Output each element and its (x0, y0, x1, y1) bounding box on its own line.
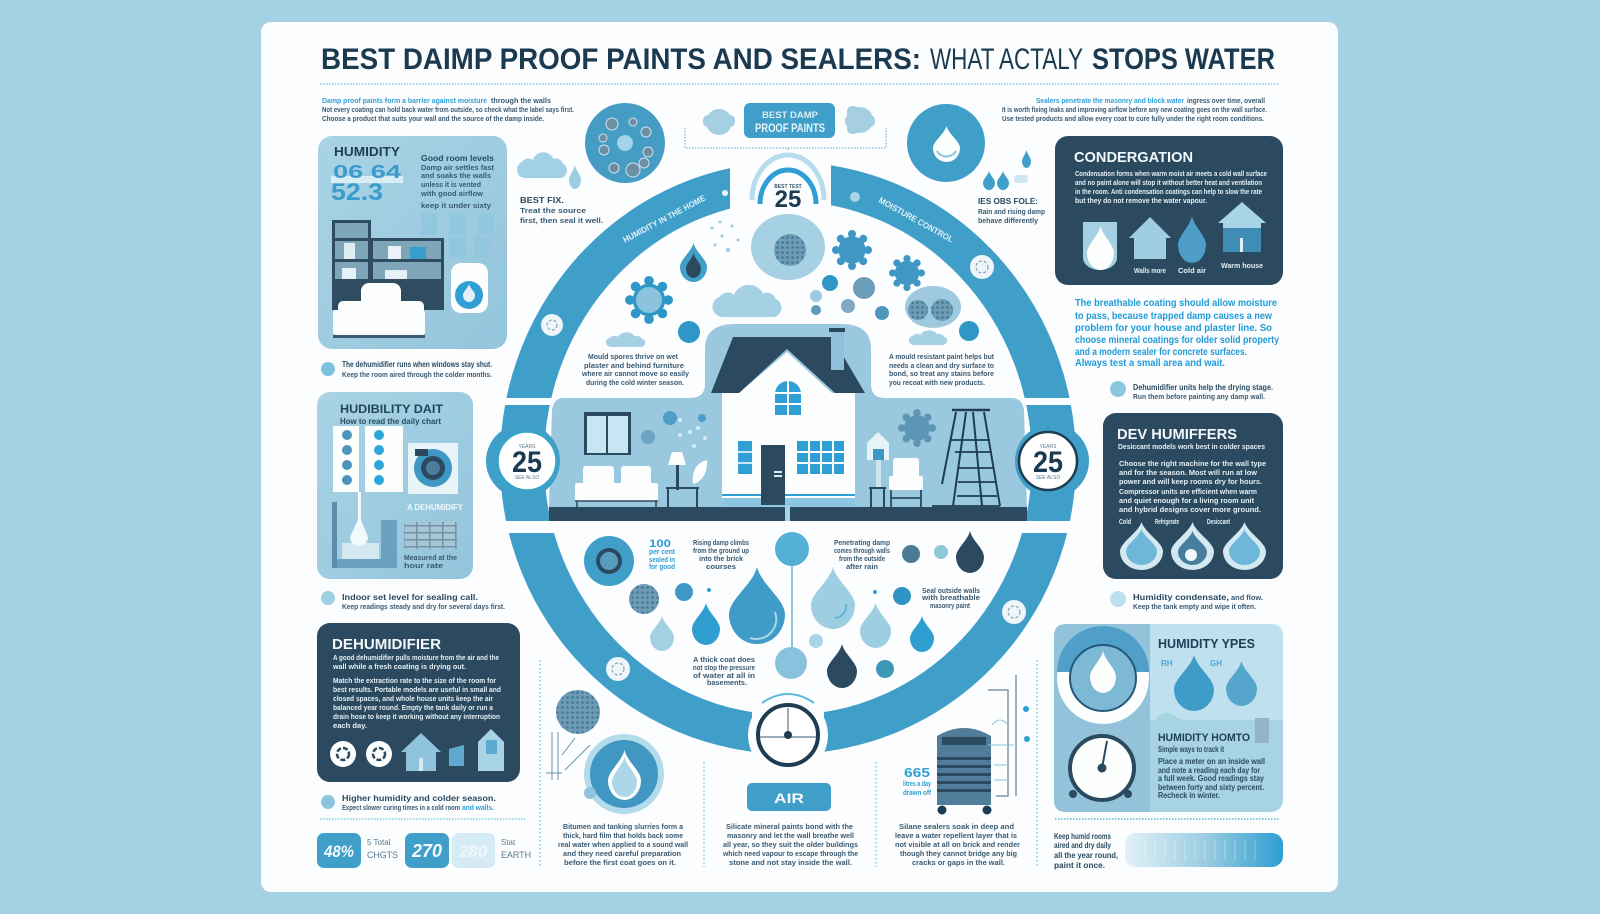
blob with virus (751, 214, 825, 280)
gradient scale bar (1125, 833, 1283, 867)
bottom right note: paint it once. (1054, 861, 1105, 870)
lower text right: Penetrating damp (834, 540, 890, 547)
panel: humidity room: and soaks the walls (421, 173, 491, 180)
bullet note: panel one: The dehumidifier runs when windows stay shut. (342, 360, 492, 369)
stat 665 (903, 765, 932, 797)
bullet note: panel one (321, 360, 492, 379)
ring labels: HUMIDITY IN THE HOME (621, 193, 707, 245)
column text 1: thick, hard film that holds back some (563, 833, 683, 840)
bullet note: drop types: and flow. (1231, 595, 1263, 602)
panel: humidity types: RH (1161, 659, 1173, 668)
centre text left: during the cold winter season. (586, 380, 684, 387)
centre text left: where air cannot move so easily (581, 371, 689, 378)
note right of drops: masonry paint (930, 603, 971, 610)
column text 1: real water when applied to a sound wall (558, 842, 688, 849)
arch window (775, 381, 801, 415)
puzzle icons (703, 106, 875, 135)
badge left: SEE ALSO (515, 475, 539, 481)
centre text right: bond, so treat any stains before (889, 371, 994, 378)
bullet note: dehumidifier: Expect slower curing times in a cold room (342, 805, 460, 812)
badge left: 25 (512, 446, 542, 479)
short note left (520, 196, 603, 225)
header pill (744, 103, 835, 138)
title (321, 43, 1275, 76)
panel: humidity room: 06 64 (333, 162, 401, 182)
chimney (829, 328, 845, 370)
sofa (575, 466, 658, 507)
lower text right (834, 540, 890, 571)
column text 1: and they need careful preparation (563, 851, 681, 858)
panel: humidity types: between forty and sixty percent. (1158, 783, 1264, 792)
note under drops: not stop the pressure (693, 665, 755, 672)
note under drops: A thick coat does (693, 657, 755, 664)
column text 2: stone and not stay inside the wall. (729, 860, 852, 867)
top gauge: 25 (775, 186, 801, 213)
column text 2: all year, so they suit the older buildings (723, 842, 858, 849)
intro text right: It is worth fixing leaks and improving airflow before any new coating goes on the wall surface. (1002, 107, 1267, 114)
right furniture (867, 432, 923, 507)
panel: dehumidifier: closed spaces, and whole house units keep the air (333, 696, 493, 703)
top gauge (752, 155, 824, 213)
panel: drop types: power and will keep rooms dry for hours. (1119, 479, 1262, 486)
panel: drop types: and quiet enough for a living room unit (1119, 498, 1255, 505)
panel: condensation: CONDERGATION (1074, 149, 1193, 166)
badge right: 25 (1033, 446, 1063, 479)
panel: humidity chart: HUDIBILITY DAIT (340, 402, 444, 416)
bullet note: dehumidifier: and walls. (462, 805, 494, 812)
house scene (549, 324, 1027, 521)
stat boxes left: 270 (411, 841, 442, 861)
dehumidifier tank (937, 675, 1030, 814)
blue paragraph: to pass, because trapped damp causes a new (1075, 311, 1272, 322)
note under drops: of water at all in (693, 673, 755, 680)
lower text blocks: courses (706, 564, 736, 571)
clock (1069, 736, 1134, 800)
bullet note: dehumidifier (321, 794, 496, 812)
column text 3: though they cannot bridge any big (900, 851, 1017, 858)
humidity gauge (1057, 626, 1149, 724)
stat 100: for good (649, 564, 675, 571)
bottom right note: Keep humid rooms (1054, 832, 1111, 841)
panel: humidity types: and note a reading each day for (1158, 766, 1260, 775)
column text 2: which need vapour to escape through the (722, 851, 858, 858)
blue paragraph: and a modern sealer for concrete surfaces. (1075, 347, 1247, 358)
panel: condensation: but they do not remove the water vapour. (1075, 198, 1207, 205)
bottom right note: aired and dry daily (1054, 841, 1111, 850)
header pill: BEST DAMP (762, 110, 819, 121)
blue paragraph: The breathable coating should allow moisture (1075, 298, 1277, 309)
bullet note: dehumidifier: Higher humidity and colder season. (342, 794, 496, 803)
intro text right: ingress over time, overall (1187, 98, 1265, 105)
panel: drop types: Compressor units are efficient when warm (1119, 489, 1257, 496)
centre text left: Mould spores thrive on wet (588, 354, 679, 361)
scene background (549, 324, 1027, 507)
stat 665: litres a day (903, 781, 931, 788)
lower text right: from the outside (839, 556, 885, 563)
panel: humidity types: HUMIDITY YPES (1158, 636, 1255, 651)
panel: dehumidifier: Match the extraction rate to the size of the room for (333, 678, 496, 685)
panel: humidity types: HUMIDITY HOMTO (1158, 732, 1250, 744)
panel: humidity chart: Measured at the (404, 555, 457, 562)
panel: dehumidifier (317, 623, 520, 782)
panel: humidity room: 52.3 (331, 179, 383, 206)
bullet note: humidity chart (321, 591, 505, 611)
central ring (480, 150, 1100, 764)
lower text blocks: into the brick (699, 556, 743, 563)
intro text left: Not every coating can hold back water from outside, so check what the label says first. (322, 107, 574, 114)
panel: humidity chart: How to read the daily chart (340, 417, 441, 426)
small drops (983, 150, 1031, 190)
panel: humidity room: keep it under sixty (421, 203, 491, 210)
bullet note: humidity chart: Keep readings steady and dry for several days first. (342, 604, 505, 611)
bullet note: drop types: Humidity condensate, (1133, 593, 1229, 602)
panel: dehumidifier: DEHUMIDIFIER (332, 636, 441, 653)
column text 2 (722, 824, 858, 867)
panel: condensation: Walls more (1134, 268, 1166, 275)
title: WHAT ACTALY (930, 43, 1083, 76)
blue circle with droplets (585, 103, 665, 183)
badge left: YEARS (519, 444, 536, 450)
virus (898, 409, 936, 447)
main white card (261, 22, 1338, 892)
icons (1083, 202, 1266, 270)
stat boxes left: 280 (458, 842, 488, 861)
panel: dehumidifier: drain hose to keep it working without any interruption (333, 714, 500, 721)
roof (711, 337, 865, 393)
title: BEST DAIMP PROOF PAINTS AND SEALERS: (321, 43, 921, 76)
bullet note: drop types: Keep the tank empty and wipe it often. (1133, 604, 1256, 611)
panel: drop types: Refrigerate (1155, 519, 1179, 526)
bullet note: drop types (1110, 591, 1263, 611)
panel: drop types: and hybrid designs cover more ground. (1119, 507, 1261, 514)
intro text right: Sealers penetrate the masonry and block water (1036, 98, 1184, 105)
blue paragraph: problem for your house and plaster line. So (1075, 323, 1272, 334)
dehumidifier (451, 263, 488, 313)
panel: humidity room: Good room levels (421, 154, 495, 163)
column text 2: masonry and let the wall breathe well (727, 833, 854, 840)
panel: drop types: DEV HUMIFFERS (1117, 426, 1237, 443)
short note left: BEST FIX. (520, 196, 564, 205)
centre text right: you recoat with new products. (889, 380, 985, 387)
panel: condensation: Cold air (1178, 268, 1206, 275)
centre text left: plaster and behind furniture (584, 363, 684, 370)
panel: dehumidifier: best results. Portable models are useful in small and (333, 687, 501, 694)
panel: humidity room: unless it is vented (421, 182, 481, 189)
panel: dehumidifier: each day. (333, 723, 367, 730)
panel: humidity types: Place a meter on an inside wall (1158, 757, 1265, 766)
stat boxes left (317, 833, 531, 868)
ground (549, 507, 1027, 521)
panel: humidity room: with good airflow (420, 191, 484, 198)
panel: condensation: Condensation forms when warm moist air meets a cold wall surface (1075, 171, 1267, 178)
stat 665: 665 (904, 765, 930, 780)
stat 100: per cent (649, 549, 676, 556)
badge left (486, 424, 560, 498)
dotted bracket (685, 128, 886, 156)
centre text left (581, 354, 689, 387)
panel: drop types: and for the season. Most will run at low (1119, 470, 1258, 477)
blue paragraph: choose mineral coatings for older solid property (1075, 335, 1279, 346)
drop circle (907, 104, 985, 182)
icons (330, 729, 504, 771)
panel: humidity types: Recheck in winter. (1158, 791, 1220, 800)
virus and droplets: left (625, 220, 740, 343)
panel: drop types (1103, 413, 1283, 579)
short note right: IES OBS FOLE: (978, 197, 1038, 206)
centre text right: needs a clean and dry surface to (889, 363, 994, 370)
panel: humidity room (318, 136, 507, 349)
stat 100: 100 (649, 538, 671, 550)
door (761, 445, 785, 505)
badge right (1015, 424, 1089, 498)
stat 665: drawn off (903, 790, 932, 797)
short note right (978, 197, 1045, 225)
panel: drop types: Cold (1119, 519, 1131, 526)
left window (584, 412, 631, 455)
panel: condensation: and no paint alone will stop it without better heat and ventilation (1075, 180, 1262, 187)
intro text left: Choose a product that suits your wall and the source of the damp inside. (322, 116, 544, 123)
lower text right: comes through walls (834, 548, 890, 555)
stat boxes left: CHGTS (367, 850, 398, 860)
lower text blocks: from the ground up (693, 548, 749, 555)
column text 1: Bitumen and tanking slurries form a (563, 824, 683, 831)
panel: humidity chart (317, 392, 473, 579)
short note right: Rain and rising damp (978, 209, 1045, 216)
intro text right (1002, 98, 1267, 123)
stat boxes left: Stat (501, 838, 516, 847)
stat boxes left: EARTH (501, 850, 531, 860)
panel: condensation (1055, 136, 1283, 285)
panel: humidity chart: hour rate (404, 563, 443, 570)
column text 3: Silane sealers soak in deep and (899, 824, 1014, 831)
title: STOPS WATER (1092, 43, 1275, 76)
note right of drops (921, 588, 980, 610)
panel: dehumidifier: wall while a fresh coating is drying out. (332, 664, 466, 671)
ring labels: MOISTURE CONTROL (877, 195, 955, 244)
lower text blocks (693, 540, 749, 571)
column text 1: before the first coat goes on it. (564, 860, 676, 867)
header pill: PROOF PAINTS (755, 121, 825, 135)
lower windows (738, 441, 844, 474)
column text 1 (558, 824, 688, 867)
top gauge: BEST TEST (774, 184, 802, 190)
dark drop (680, 243, 707, 282)
blue paragraph: Always test a small area and wait. (1075, 358, 1225, 369)
stat 100 (649, 538, 676, 571)
badge right: YEARS (1040, 444, 1057, 450)
intro text left: through the walls (491, 98, 551, 105)
panel: drop types: Desiccant (1207, 519, 1230, 526)
stat boxes left: 5 Total (367, 838, 391, 847)
short note left: Treat the source (520, 208, 586, 215)
panel: humidity room: Damp air settles fast (421, 165, 495, 172)
note under drops (693, 657, 755, 687)
bubbles (641, 411, 707, 448)
intro text left: Damp proof paints form a barrier against moisture (322, 98, 487, 105)
cloud and droplet (517, 152, 581, 189)
bullet note: panel one: Keep the room aired through the colder months. (342, 372, 492, 379)
bottom right note (1054, 832, 1118, 870)
centre text right: A mould resistant paint helps but (889, 354, 995, 361)
note right of drops: with breathable (921, 595, 980, 602)
panel: humidity types: a full week. Good readings stay (1158, 774, 1264, 783)
panel: drop types: Desiccant models work best in colder spaces (1118, 444, 1265, 451)
blue paragraph (1075, 298, 1279, 369)
panel: humidity types: GH (1210, 659, 1222, 668)
lower text right: after rain (846, 564, 878, 571)
stat 100: sealed in (649, 557, 675, 564)
sofa (333, 283, 425, 335)
panel: condensation: Warm house (1221, 263, 1263, 270)
panel: dehumidifier: balanced year round. Empty the tank daily or run a (333, 705, 493, 712)
column text 3: not visible at all on brick and render (895, 842, 1020, 849)
bullet note: humidity chart: Indoor set level for sealing call. (342, 593, 478, 602)
lamp and table (666, 452, 707, 507)
house body (722, 352, 855, 505)
short note right: behave differently (978, 218, 1038, 225)
bottom right note: all the year round, (1054, 851, 1118, 860)
column dividers (540, 660, 1037, 867)
virus and droplets: right (810, 230, 979, 341)
bullet note: condensation: Dehumidifier units help the drying stage. (1133, 383, 1273, 392)
panel: humidity room: HUMIDITY (334, 144, 400, 159)
column text 3: leave a water repellent layer that is (895, 833, 1017, 840)
note right of drops: Seal outside walls (922, 588, 980, 595)
lower ring droplets (584, 531, 984, 688)
column text 3: cracks or gaps in the wall. (912, 860, 1005, 867)
air pill: AIR (774, 790, 804, 806)
ladder (932, 410, 1000, 506)
mesh circle and drop circle (546, 690, 664, 814)
panel: dehumidifier: A good dehumidifier pulls moisture from the air and the (333, 655, 499, 662)
panel: humidity types: Simple ways to track it (1158, 745, 1224, 754)
panel: humidity types (1054, 624, 1283, 812)
clock bottom (748, 694, 828, 775)
intro text left (322, 98, 574, 123)
intro text right: Use tested products and allow every coat to cure fully under the right room conditions. (1002, 116, 1264, 123)
centre text right (889, 354, 995, 387)
short note left: first, then seal it well. (520, 218, 603, 225)
note under drops: basements. (707, 680, 747, 687)
chart tiles (421, 213, 494, 258)
panel: humidity chart: A DEHUMIDIFY (407, 503, 464, 512)
column text 3 (895, 824, 1020, 867)
column text 2: Silicate mineral paints bond with the (726, 824, 853, 831)
ring labels (621, 193, 955, 245)
bullet note: condensation (1110, 381, 1273, 401)
stat boxes left: 48% (323, 842, 354, 861)
panel: condensation: in the room. Anti condensation coatings can help to slow the rate (1075, 189, 1262, 196)
clouds (606, 285, 947, 347)
shelf (332, 220, 444, 310)
ring bubbles (541, 190, 1026, 681)
badge right: SEE ALSO (1036, 475, 1060, 481)
lower text blocks: Rising damp climbs (693, 540, 749, 547)
panel: drop types: Choose the right machine for the wall type (1119, 461, 1266, 468)
bullet note: condensation: Run them before painting any damp wall. (1133, 394, 1265, 401)
air pill (747, 783, 831, 811)
